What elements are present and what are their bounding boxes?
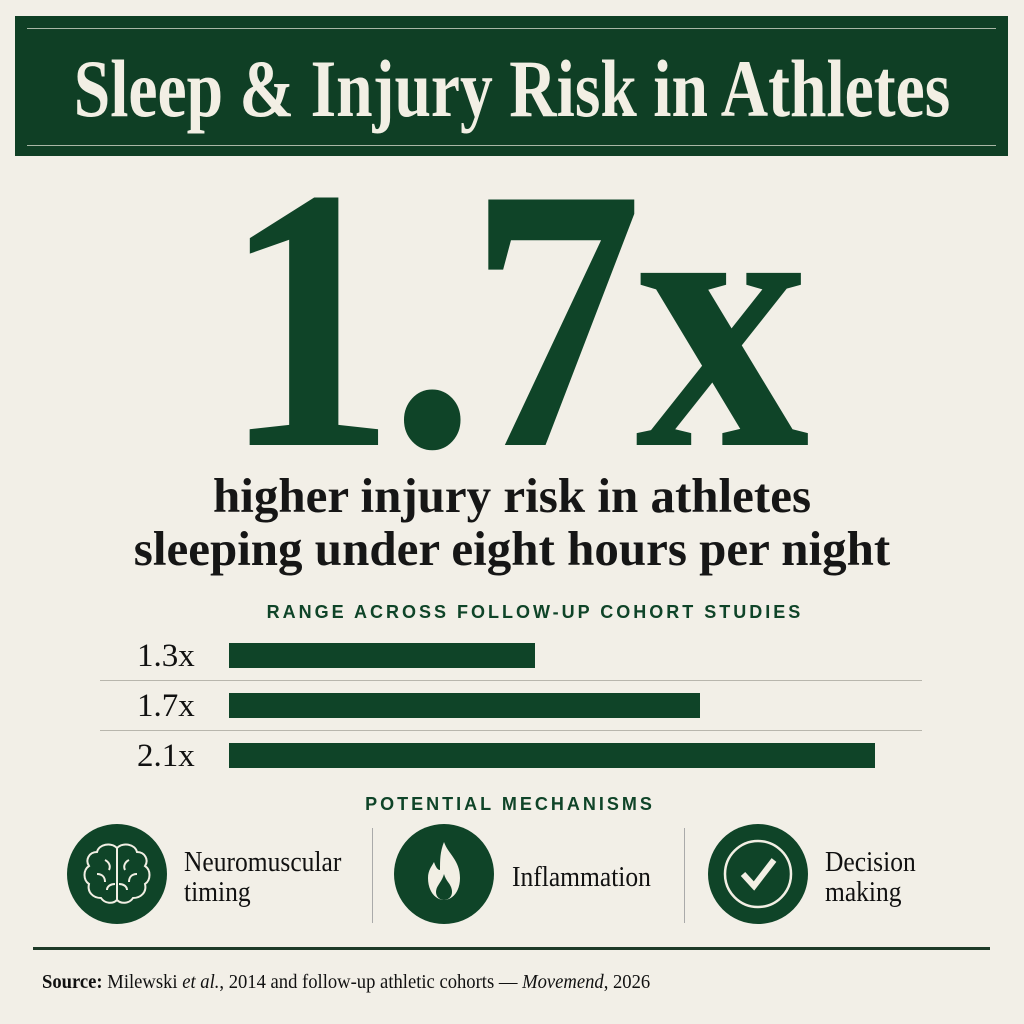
mechanism: inflammation bbox=[394, 824, 651, 924]
mechanism: neuromuscular: timing bbox=[184, 876, 251, 908]
mechanism: decision making bbox=[708, 824, 916, 924]
subtitle: higher injury risk in athletes bbox=[213, 468, 811, 523]
subtitle bbox=[134, 468, 890, 576]
title: Sleep & Injury Risk in Athletes bbox=[73, 43, 950, 134]
big stat: 1.7x bbox=[222, 112, 802, 527]
text: 1.7x bbox=[137, 688, 195, 724]
mechanism: decision making: Decision bbox=[825, 846, 916, 878]
footer rule bbox=[33, 947, 990, 950]
mechanism: inflammation: Inflammation bbox=[512, 861, 651, 893]
icon: brain bbox=[67, 824, 167, 924]
icon: flame bbox=[394, 824, 494, 924]
source: Source: Milewski et al., 2014 and follow-up athletic cohorts — Movemend, 2026 bbox=[42, 971, 650, 993]
bar chart bbox=[100, 638, 922, 773]
subtitle: sleeping under eight hours per night bbox=[134, 521, 890, 576]
text: 2.1x bbox=[137, 738, 195, 774]
mechanisms heading: POTENTIAL MECHANISMS bbox=[365, 794, 655, 814]
mechanism: neuromuscular: Neuromuscular bbox=[184, 846, 341, 878]
mechanism: neuromuscular bbox=[67, 824, 342, 924]
range heading: RANGE ACROSS FOLLOW-UP COHORT STUDIES bbox=[267, 602, 803, 622]
title banner bbox=[15, 16, 1008, 156]
text: 1.3x bbox=[137, 638, 195, 674]
mechanism: decision making: making bbox=[825, 876, 902, 908]
icon: check bbox=[708, 824, 808, 924]
